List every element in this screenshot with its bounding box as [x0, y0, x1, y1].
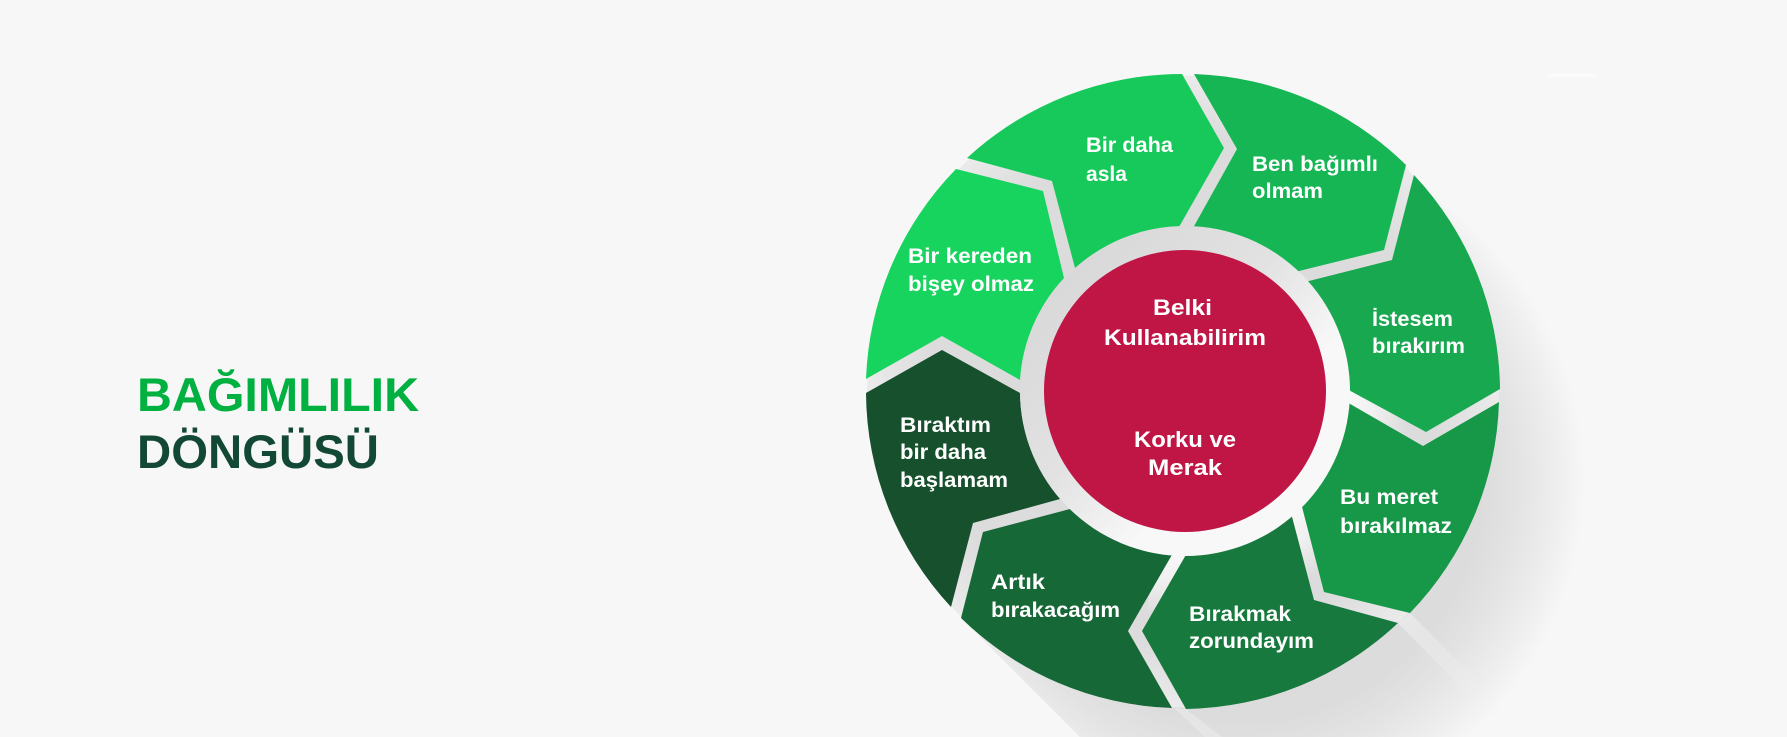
segment: Bir daha asla: Bir daha	[1086, 134, 1173, 157]
segment: Bıraktım bir daha başlamam: bir daha	[900, 441, 986, 464]
center text: Belki Kullanabilirim: Belki	[1153, 295, 1212, 320]
title line 2: DÖNGÜSÜ	[137, 425, 379, 478]
segment: Bıraktım bir daha başlamam	[866, 350, 1060, 607]
faint top-right mark	[1549, 74, 1596, 77]
center circle	[1044, 250, 1326, 532]
segment: Artık bırakacağım: Artık	[991, 571, 1045, 594]
center text: Belki Kullanabilirim	[1104, 295, 1266, 350]
segment: Bir kereden bişey olmaz: Bir kereden	[908, 245, 1032, 268]
wheel backing disc	[867, 76, 1499, 708]
segment: Bırakmak zorundayım: zorundayım	[1189, 630, 1314, 653]
segment: Bırakmak zorundayım	[1142, 513, 1398, 709]
center text: Korku ve Merak: Korku ve	[1134, 427, 1236, 452]
segment: Bu meret bırakılmaz: bırakılmaz	[1340, 515, 1452, 538]
segment: Ben bağımlı olmam	[1193, 74, 1406, 272]
segment: Bıraktım bir daha başlamam: başlamam	[900, 469, 1008, 492]
segment: Bu meret bırakılmaz	[1301, 401, 1499, 613]
segment: Bırakmak zorundayım: Bırakmak	[1189, 603, 1291, 626]
segment: Bir kereden bişey olmaz: bişey olmaz	[908, 273, 1034, 296]
segment: Artık bırakacağım: bırakacağım	[991, 599, 1120, 622]
title line 1: BAĞIMLILIK	[137, 368, 419, 421]
segment: İstesem bırakırım	[1305, 175, 1500, 432]
segment: Ben bağımlı olmam: Ben bağımlı	[1252, 153, 1378, 176]
long shadow of wheel	[961, 172, 1585, 737]
center text: Belki Kullanabilirim: Kullanabilirim	[1104, 325, 1266, 350]
segment: İstesem bırakırım: bırakırım	[1372, 335, 1465, 358]
cycle wheel	[866, 74, 1500, 709]
segment: İstesem bırakırım: İstesem	[1372, 308, 1453, 331]
segment: Artık bırakacağım	[961, 509, 1173, 708]
segment: Bir daha asla	[967, 74, 1224, 268]
segment: Bir kereden bişey olmaz	[866, 169, 1064, 380]
segment: Ben bağımlı olmam: olmam	[1252, 180, 1323, 203]
segment: Bıraktım bir daha başlamam: Bıraktım	[900, 414, 991, 437]
center ring	[1020, 226, 1350, 556]
title	[137, 368, 419, 478]
segment: Bu meret bırakılmaz: Bu meret	[1340, 486, 1438, 509]
center text: Korku ve Merak: Merak	[1148, 455, 1223, 480]
center text: Korku ve Merak	[1134, 427, 1236, 480]
segment: Bir daha asla: asla	[1086, 163, 1127, 186]
